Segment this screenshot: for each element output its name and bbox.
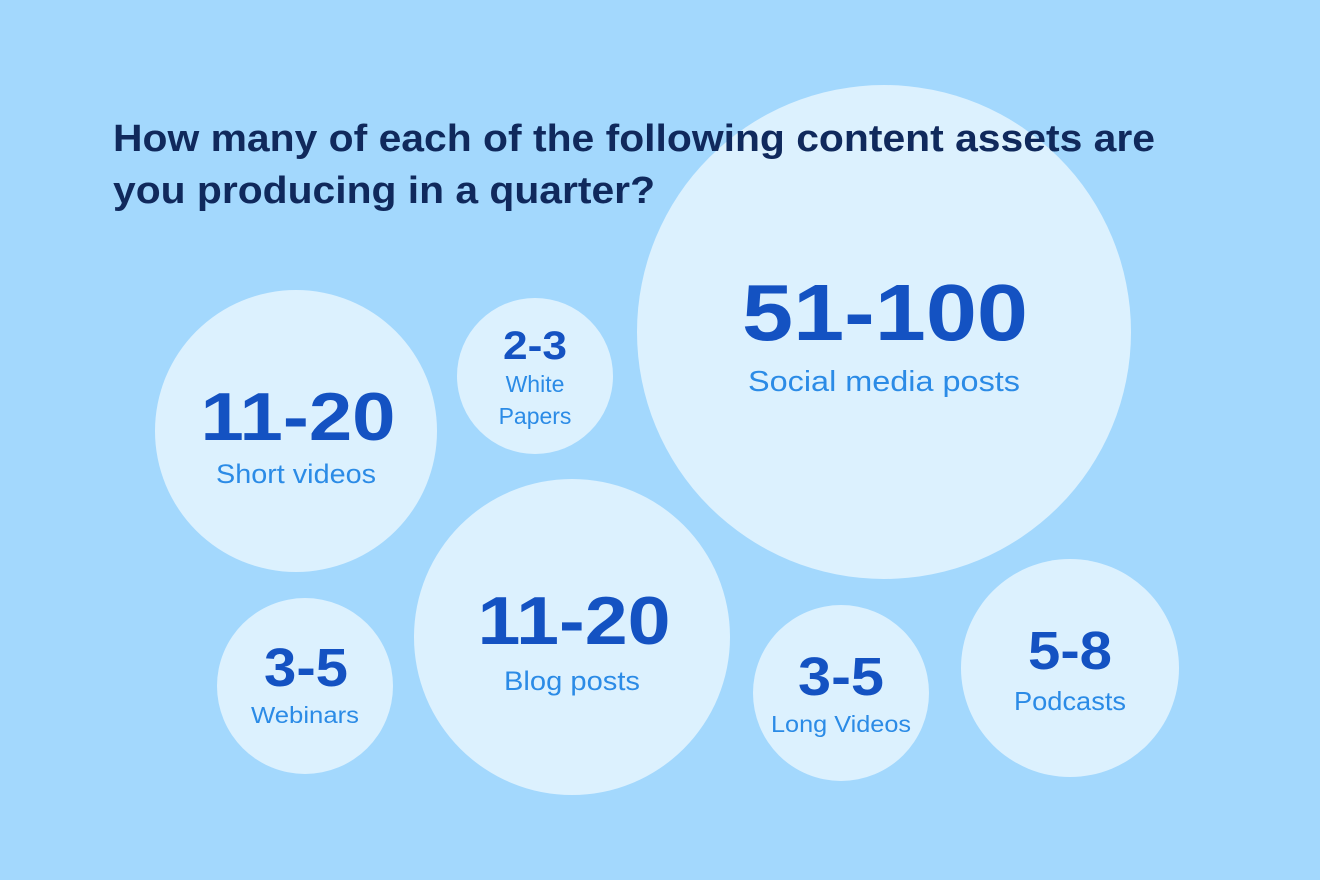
bubble: webinars: 3-5	[264, 638, 348, 698]
bubble: white papers: 2-3	[503, 324, 567, 368]
bubble: social media posts	[637, 85, 1131, 579]
bubble: webinars	[217, 598, 393, 774]
title: you producing in a quarter?	[113, 170, 655, 212]
bubble: blog posts	[414, 479, 730, 795]
bubble: podcasts: Podcasts	[1014, 686, 1126, 716]
bubble: blog posts: 11-20	[478, 583, 670, 659]
bubble: blog posts: Blog posts	[504, 666, 640, 696]
bubble: white papers: White	[506, 371, 564, 397]
bubble: white papers: Papers	[499, 403, 571, 429]
bubble: webinars: Webinars	[251, 702, 359, 728]
title	[113, 118, 1155, 212]
title: How many of each of the following content assets are	[113, 118, 1155, 160]
bubble: short videos: Short videos	[216, 459, 376, 489]
bubble: short videos: 11-20	[200, 379, 396, 455]
bubble: podcasts	[961, 559, 1179, 777]
bubble: white papers	[457, 298, 613, 454]
bubble: social media posts: 51-100	[742, 268, 1028, 357]
bubble: short videos	[155, 290, 437, 572]
bubble: long videos	[753, 605, 929, 781]
bubble: long videos: Long Videos	[771, 711, 911, 737]
bubble: social media posts: Social media posts	[748, 366, 1020, 398]
bubble: podcasts: 5-8	[1028, 621, 1112, 681]
bubble: long videos: 3-5	[798, 647, 884, 707]
